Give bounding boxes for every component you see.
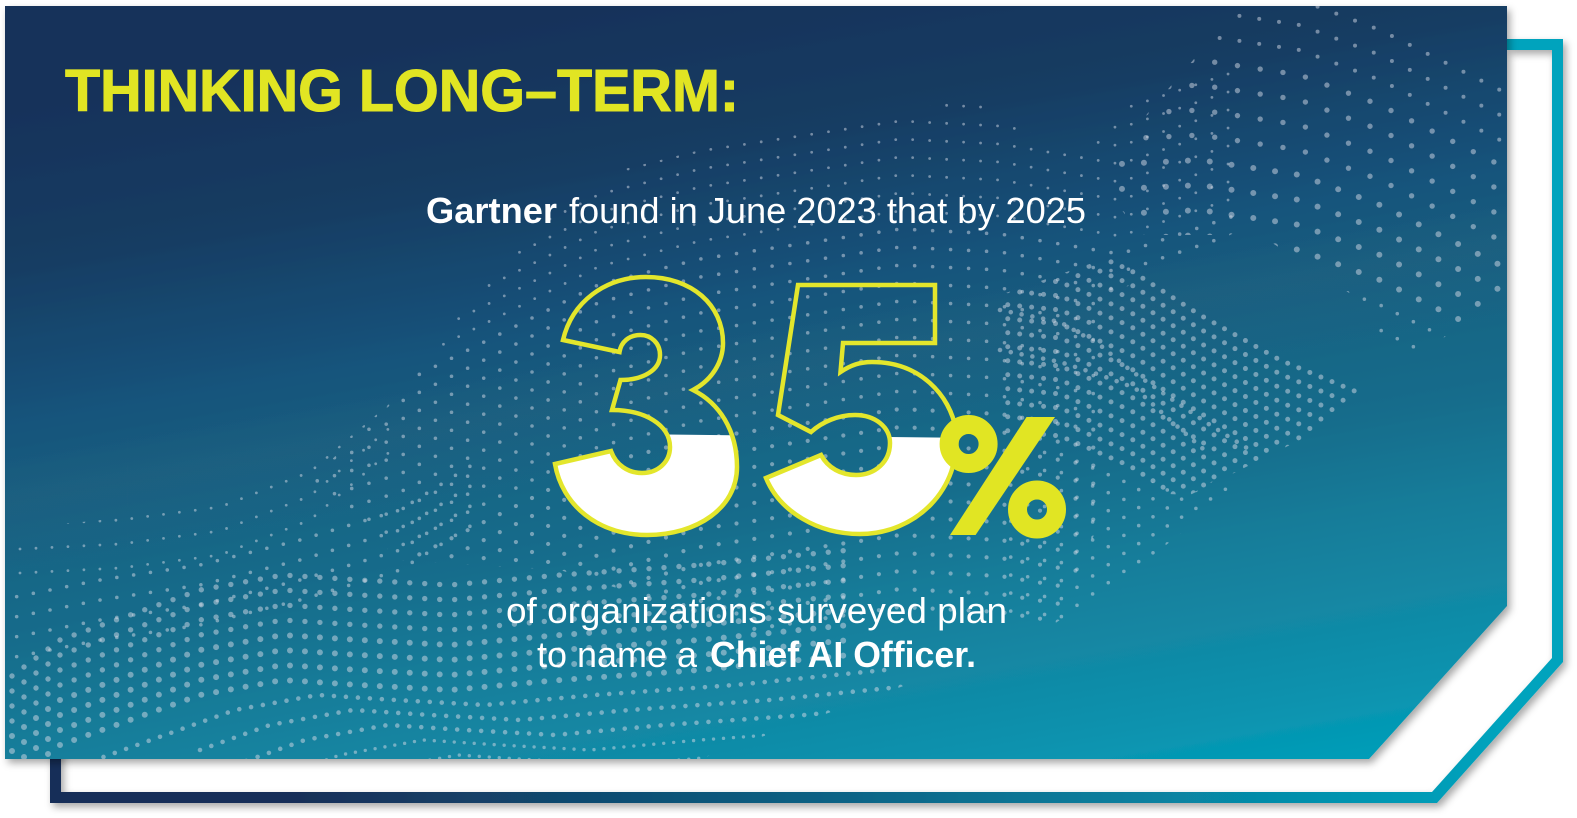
closing text: Chief AI Officer. — [710, 634, 976, 675]
white half fill of digits — [558, 434, 950, 533]
big number: 35% — [555, 277, 1056, 535]
digit 5 outline — [766, 285, 957, 534]
title: THINKING LONG–TERM: — [65, 58, 739, 124]
intro text: Gartner — [426, 190, 557, 231]
closing text — [506, 590, 1007, 675]
closing text: of organizations surveyed plan — [506, 590, 1007, 631]
closing text: to name a — [537, 634, 698, 675]
percent sign — [949, 417, 1056, 535]
digit 3 outline — [555, 277, 737, 535]
intro text: found in June 2023 that by 2025 — [569, 190, 1086, 231]
